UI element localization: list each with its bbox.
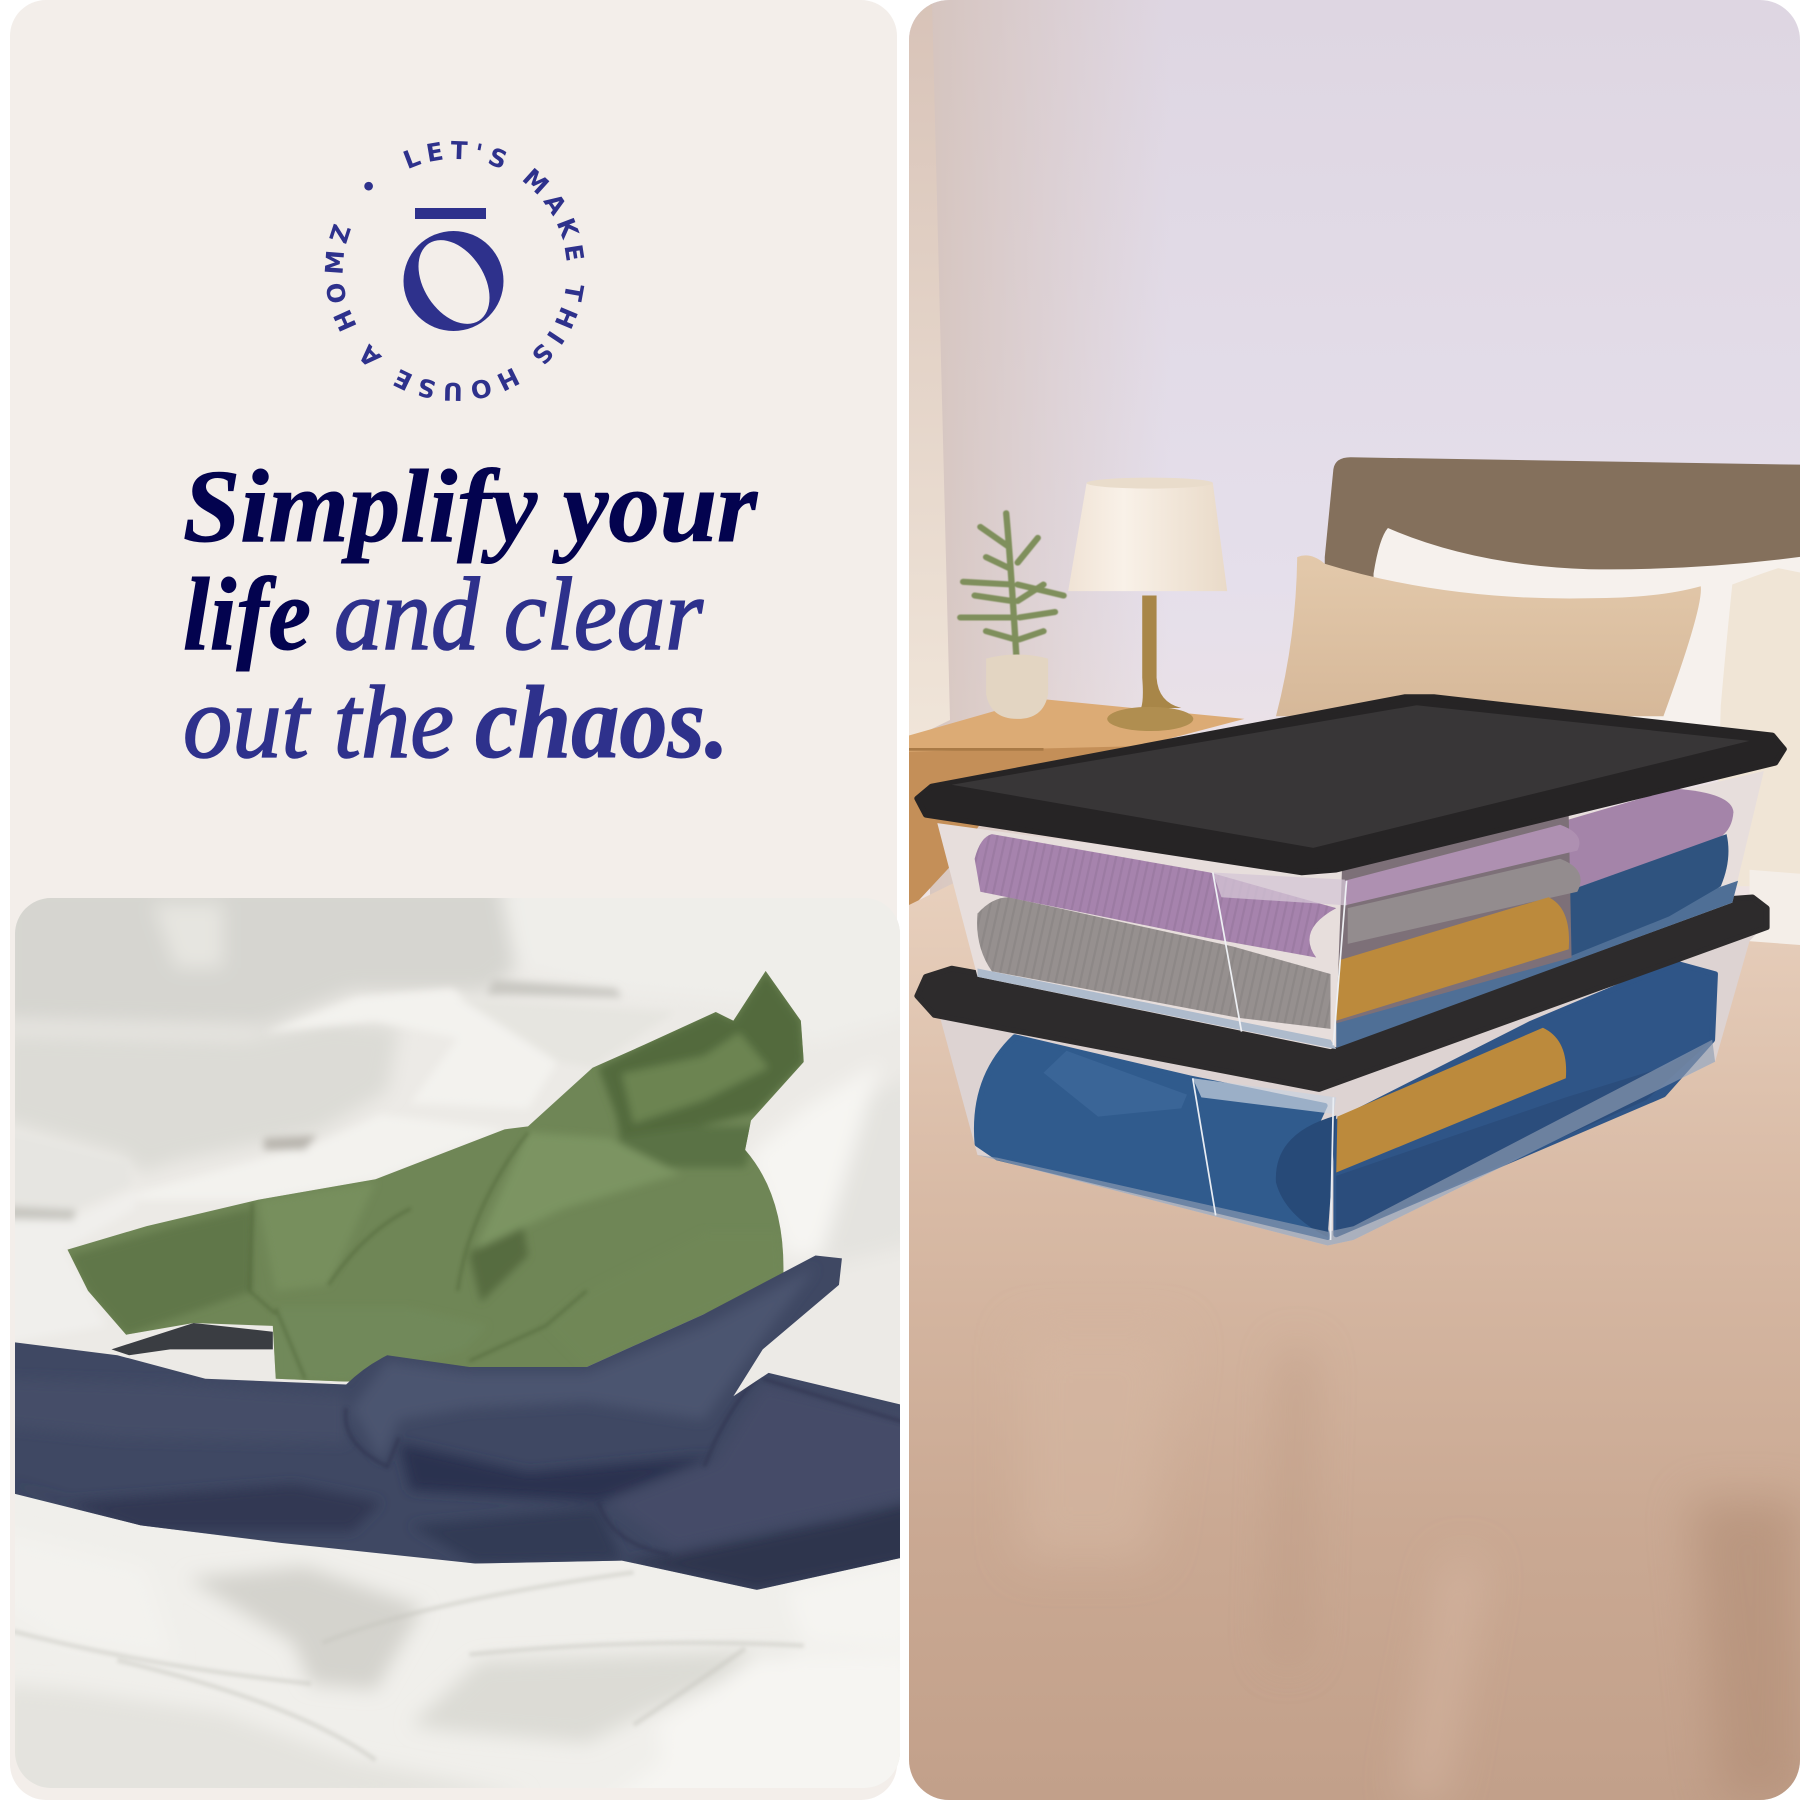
cream pillow xyxy=(1715,568,1800,886)
bed xyxy=(909,880,1800,1800)
beige pillow xyxy=(1276,555,1701,716)
heading: and clear xyxy=(334,557,703,672)
plant xyxy=(960,513,1064,719)
headboard xyxy=(1325,457,1800,585)
nightstand xyxy=(900,699,1244,908)
lower storage box xyxy=(940,919,1770,1245)
logo badge xyxy=(324,140,584,401)
lower lid xyxy=(917,897,1767,1089)
heading xyxy=(183,450,759,780)
white sheet xyxy=(1750,870,1800,949)
heading: chaos. xyxy=(475,665,729,780)
sheets: upper folds xyxy=(0,880,915,1343)
photo: messy bed with clothes xyxy=(15,898,900,1788)
navy garment xyxy=(0,1250,915,1602)
upper lid xyxy=(917,697,1784,873)
icon: o with macron xyxy=(404,208,504,337)
panel: left cream panel xyxy=(10,0,897,1800)
heading: Simplify your xyxy=(183,450,759,564)
wall xyxy=(909,0,1800,1060)
photo: bedroom with clear storage boxes xyxy=(909,0,1800,1800)
sheets: lower folds xyxy=(0,1484,915,1800)
green shirt xyxy=(59,962,821,1390)
white pillow xyxy=(1374,528,1800,727)
hanger xyxy=(111,1323,273,1355)
circular tagline: LET'S MAKE THIS HOUSE A HOMZ • xyxy=(324,140,584,401)
heading: life xyxy=(183,557,311,672)
lamp xyxy=(1068,478,1227,731)
upper storage box xyxy=(937,771,1764,1049)
heading: out the xyxy=(183,665,454,780)
